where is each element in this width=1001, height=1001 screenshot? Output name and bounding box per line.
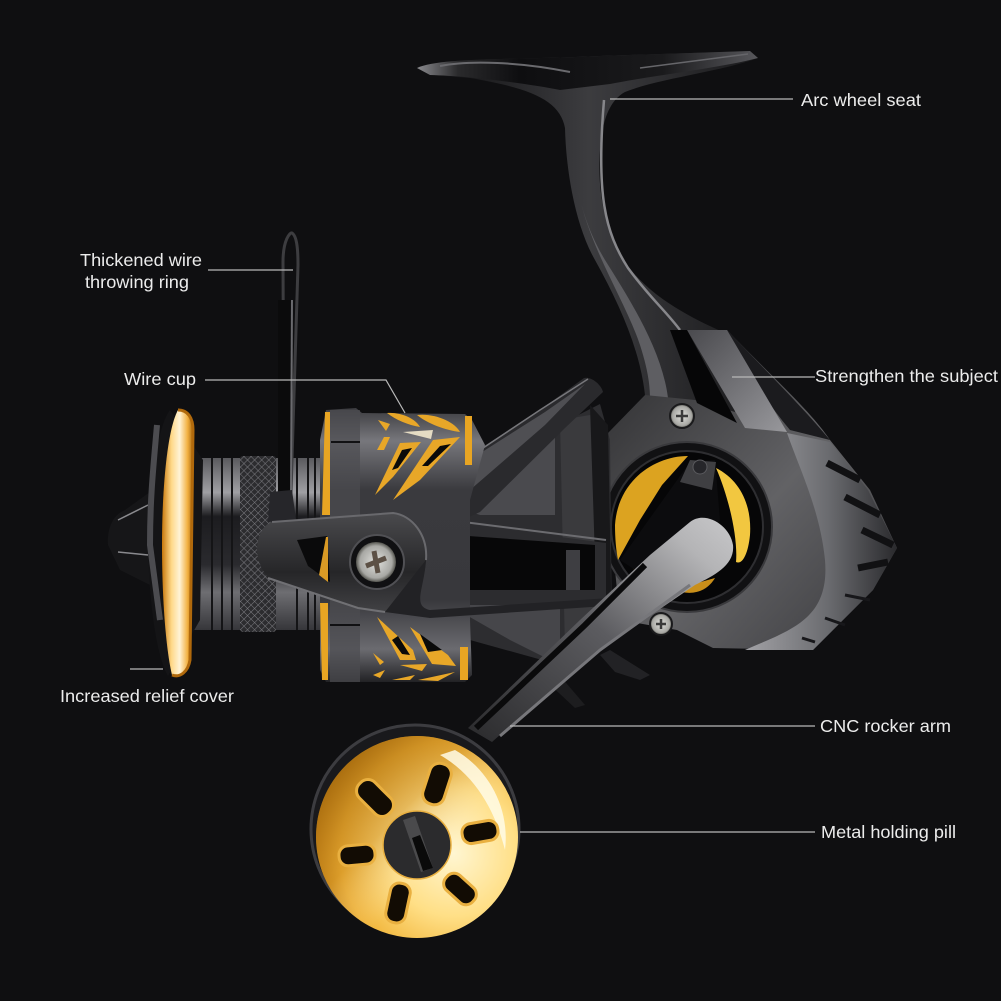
frame screw lower bbox=[650, 613, 672, 635]
label: Wire cup bbox=[124, 369, 405, 413]
wire cup bbox=[320, 408, 485, 682]
label: Thickened wire throwing ring: Thickened wire bbox=[80, 250, 202, 270]
rotor bbox=[430, 404, 650, 708]
knob gold face bbox=[316, 736, 518, 938]
fishing reel bbox=[108, 51, 897, 938]
thickened wire throwing ring bbox=[268, 233, 298, 522]
knob center cap bbox=[383, 811, 451, 879]
main gear body bbox=[608, 330, 897, 650]
knurled ring bbox=[240, 456, 276, 632]
bail arm screw bbox=[350, 535, 404, 589]
label: Thickened wire throwing ring: throwing ring bbox=[85, 272, 189, 292]
label: Thickened wire throwing ring bbox=[80, 250, 293, 292]
rotor top fin bbox=[398, 378, 603, 530]
increased relief cover bbox=[148, 410, 203, 676]
CNC rocker arm bbox=[468, 518, 733, 742]
label: Metal holding pill: Metal holding pill bbox=[821, 822, 956, 842]
label: Wire cup: Wire cup bbox=[124, 369, 196, 389]
label: Arc wheel seat: Arc wheel seat bbox=[801, 90, 921, 110]
gold gear disc bbox=[602, 442, 772, 612]
knob slots bbox=[338, 761, 499, 925]
knob highlight bbox=[440, 750, 506, 850]
frame screw upper bbox=[670, 404, 694, 428]
reel seat and stem bbox=[417, 51, 760, 420]
label: CNC rocker arm: CNC rocker arm bbox=[820, 716, 951, 736]
label: Strengthen the subject: Strengthen the subject bbox=[815, 366, 998, 386]
spool front cap bbox=[108, 492, 150, 585]
wire cup gold mesh top bbox=[375, 413, 460, 500]
label: Increased relief cover: Increased relief cover bbox=[60, 686, 234, 706]
metal holding pill bbox=[311, 725, 519, 938]
bail arm plate bbox=[257, 513, 610, 618]
wire cup gold mesh bottom bbox=[373, 617, 456, 681]
knob rim bbox=[311, 725, 519, 933]
spool shaft bbox=[190, 458, 325, 630]
